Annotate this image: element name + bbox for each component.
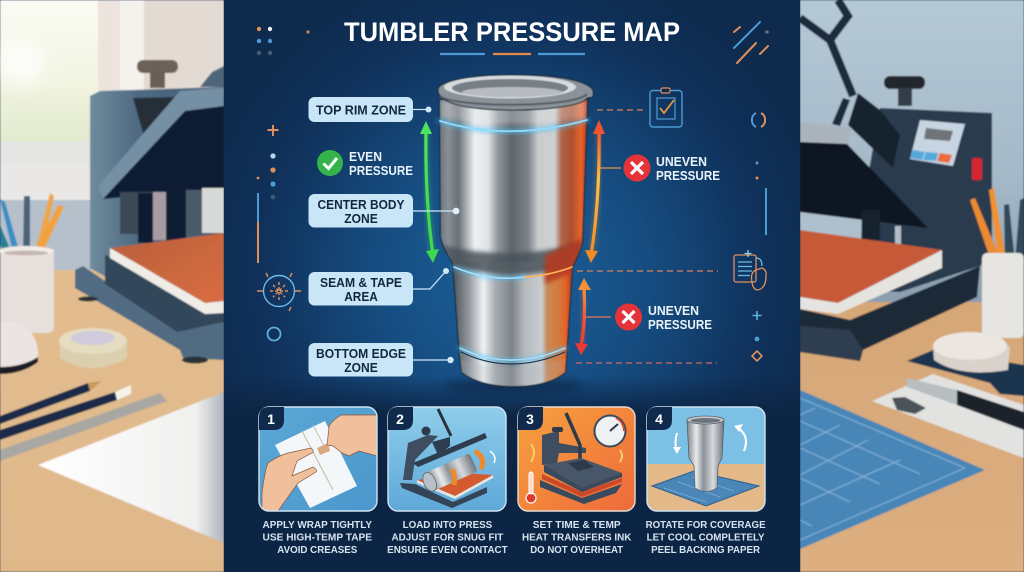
- step card 3: set time and temp: [518, 407, 635, 511]
- rim highlight band: [440, 100, 587, 124]
- pencil cup, left: [0, 193, 64, 333]
- step card 1: apply wrap: [259, 407, 377, 511]
- callout: seam and tape area: [308, 268, 449, 306]
- step number 1: 1: [267, 411, 275, 427]
- icon: seam target: [257, 273, 301, 311]
- step text 3: HEAT TRANSFERS INK: [522, 532, 632, 544]
- heat press, right: [800, 0, 992, 361]
- step text 3: SET TIME & TEMP: [533, 519, 621, 531]
- background photo: right workspace: [800, 0, 1024, 572]
- callout: bottom edge zone: [308, 343, 454, 376]
- step text 1: USE HIGH-TEMP TAPE: [263, 532, 372, 544]
- step number 2: 2: [396, 411, 404, 427]
- step text 4: [646, 519, 766, 556]
- badge: upper uneven pressure: [600, 154, 720, 183]
- badge: lower uneven pressure: UNEVEN: [648, 304, 699, 318]
- step card 4: rotate and cool: [647, 407, 765, 511]
- arrow: upper uneven pressure: [585, 120, 605, 263]
- decoration: right marks: [752, 113, 766, 361]
- mat and puck: [907, 332, 1024, 396]
- step text 4: ROTATE FOR COVERAGE: [646, 519, 766, 531]
- callout: bottom edge zone: BOTTOM EDGE: [316, 347, 406, 361]
- decoration: top-right strokes: [734, 22, 769, 63]
- pencils and ruler: [0, 381, 167, 461]
- badge: lower uneven pressure: [585, 304, 712, 332]
- badge: even pressure: PRESSURE: [349, 164, 413, 178]
- badge: even pressure: [317, 150, 413, 178]
- dome and tape: [0, 321, 127, 374]
- paper and craft knife: [872, 374, 1024, 458]
- callout: seam and tape area: SEAM & TAPE: [320, 276, 402, 290]
- callout: center body zone: CENTER BODY: [318, 198, 405, 212]
- icon: clipboard check: [650, 88, 682, 127]
- wrap sheet: [275, 421, 357, 508]
- dashed guide lines: [576, 110, 718, 363]
- decoration: left marks: [257, 125, 280, 340]
- step text 2: ENSURE EVEN CONTACT: [387, 544, 508, 556]
- title underline: [440, 53, 585, 55]
- callout: top rim zone: TOP RIM ZONE: [316, 103, 406, 117]
- decoration: top-left dots: [257, 27, 310, 55]
- tumbler lid: [438, 75, 593, 110]
- mini tumbler: [687, 420, 724, 492]
- paper sheet: [38, 392, 224, 543]
- tumbler glow rings: [440, 120, 587, 364]
- callout: bottom edge zone: ZONE: [344, 361, 378, 375]
- arrow: green even pressure: [420, 121, 439, 263]
- callout: seam and tape area: AREA: [344, 290, 378, 304]
- main navy panel: [224, 0, 800, 572]
- right hand: [327, 415, 377, 456]
- tumbler: [438, 75, 593, 394]
- step text 2: LOAD INTO PRESS: [403, 519, 492, 531]
- shoulder shading: [441, 243, 582, 275]
- title: TUMBLER PRESSURE MAP: [344, 17, 680, 47]
- cutting mat: [800, 390, 985, 549]
- callout: top rim zone: [308, 97, 432, 122]
- arrow: lower uneven pressure: [575, 278, 591, 355]
- step number 4: 4: [655, 411, 663, 427]
- badge: even pressure: EVEN: [349, 150, 382, 164]
- callout: center body zone: ZONE: [344, 212, 378, 226]
- left hand: [262, 448, 317, 511]
- step text 2: [387, 519, 508, 556]
- badge: upper uneven pressure: UNEVEN: [656, 155, 707, 169]
- step number 3: 3: [526, 411, 534, 427]
- background photo: left workspace: [0, 0, 224, 572]
- step text 1: AVOID CREASES: [277, 544, 357, 556]
- mini press: [542, 431, 586, 465]
- step text 2: ADJUST FOR SNUG FIT: [392, 532, 504, 544]
- icon: clipboard with hand: [734, 250, 766, 290]
- step text 3: [522, 519, 632, 556]
- step text 1: [263, 519, 372, 556]
- callout: center body zone: [308, 194, 459, 228]
- step card 2: load into press: [388, 407, 506, 511]
- bottom foot: [460, 358, 566, 388]
- step text 4: PEEL BACKING PAPER: [651, 544, 760, 556]
- heat press, left: [75, 60, 224, 364]
- step text 3: DO NOT OVERHEAT: [530, 544, 624, 556]
- step text 4: LET COOL COMPLETELY: [647, 532, 765, 544]
- badge: lower uneven pressure: PRESSURE: [648, 318, 712, 332]
- step text 1: APPLY WRAP TIGHTLY: [263, 519, 372, 531]
- badge: upper uneven pressure: PRESSURE: [656, 169, 720, 183]
- pencil cup, right: [970, 188, 1024, 338]
- mini press: [403, 435, 438, 480]
